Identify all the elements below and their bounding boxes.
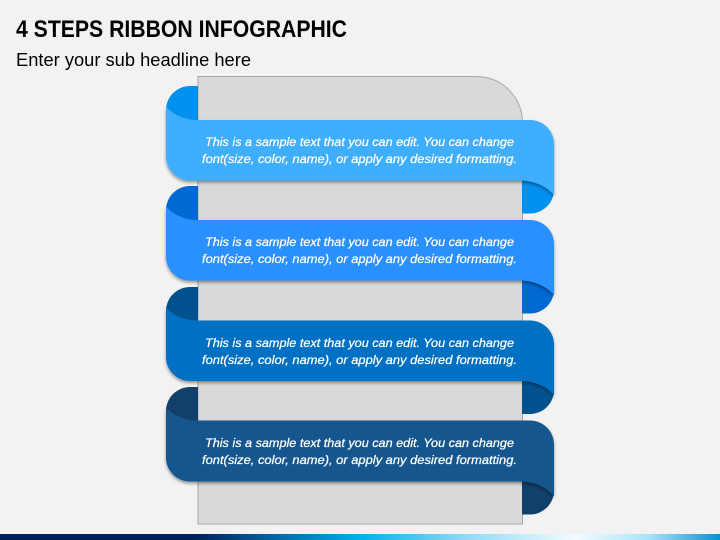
icon: ribbon 1 right fold	[522, 175, 554, 214]
panel: grey backing sheet	[198, 76, 522, 524]
icon: ribbon 2 left fold	[166, 186, 198, 225]
footer gradient bar	[0, 534, 720, 540]
icon: ribbon 2 right fold	[522, 275, 554, 314]
ribbon 1 text: font(size, color, name), or apply any desired formatting.	[202, 152, 517, 166]
ribbon 4	[166, 387, 554, 514]
icon: ribbon 1 left fold	[166, 86, 198, 125]
ribbon 3	[166, 287, 554, 414]
ribbon 4 band	[166, 407, 554, 496]
ribbon 4 text: font(size, color, name), or apply any desired formatting.	[202, 453, 517, 467]
ribbon 3 band	[166, 307, 554, 395]
icon: ribbon 4 right fold	[522, 475, 554, 514]
icon: ribbon 3 left fold	[166, 287, 198, 326]
ribbon 2	[166, 186, 554, 314]
ribbon 3 text: font(size, color, name), or apply any desired formatting.	[202, 353, 517, 367]
ribbon 1 text: This is a sample text that you can edit. You can change	[205, 135, 514, 149]
ribbon 4 text: This is a sample text that you can edit. You can change	[205, 436, 514, 450]
subtitle: Enter your sub headline here	[16, 50, 251, 70]
ribbon 1 band	[166, 106, 554, 195]
ribbon 2 text: font(size, color, name), or apply any desired formatting.	[202, 252, 517, 266]
title: 4 STEPS RIBBON INFOGRAPHIC	[16, 16, 347, 43]
ribbon 3 text: This is a sample text that you can edit. You can change	[205, 336, 514, 350]
ribbon 1	[166, 86, 554, 214]
ribbon 2 text: This is a sample text that you can edit. You can change	[205, 235, 514, 249]
icon: ribbon 4 left fold	[166, 387, 198, 426]
icon: ribbon 3 right fold	[522, 375, 554, 414]
ribbon 2 band	[166, 206, 554, 295]
